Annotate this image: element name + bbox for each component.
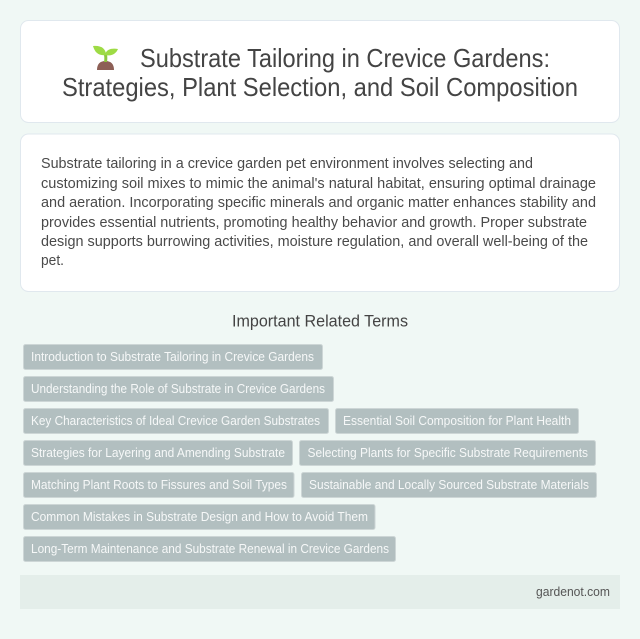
text block: description: pet. (41, 252, 64, 269)
footer: gardenot.com (536, 584, 610, 599)
tag: Essential Soil Composition for Plant Health (343, 413, 571, 428)
tag (24, 504, 375, 530)
panel: title card (20, 20, 620, 122)
text block: description: Substrate tailoring in a crevice garden pet environment involves selecting and (41, 155, 533, 172)
heading: related terms: Important Related Terms (232, 312, 408, 330)
tag: Understanding the Role of Substrate in Crevice Gardens (31, 381, 325, 396)
tag: Key Characteristics of Ideal Crevice Garden Substrates (31, 413, 320, 428)
tag (24, 472, 294, 498)
tag: Long-Term Maintenance and Substrate Renewal in Crevice Gardens (31, 541, 389, 556)
tag (24, 408, 328, 434)
title: Substrate Tailoring in Crevice Gardens: (140, 43, 550, 73)
text block: description: provides essential nutrients, promoting healthy behavior and growth. Proper substrate (41, 214, 587, 231)
tag (24, 376, 334, 402)
tag (336, 408, 578, 434)
footer (20, 575, 620, 609)
text block: description: and aeration. Incorporating specific minerals and organic matter enhances stability and (41, 194, 596, 211)
tag (24, 536, 396, 562)
tag (300, 440, 596, 466)
title: Strategies, Plant Selection, and Soil Composition (62, 72, 578, 102)
panel: related term tags (24, 344, 596, 562)
text block: description (41, 155, 596, 269)
text block: description: customizing soil mixes to mimic the animal's natural habitat, ensuring optimal drainage (41, 175, 596, 192)
tag: Selecting Plants for Specific Substrate Requirements (308, 445, 588, 460)
tag (302, 472, 596, 498)
tag: Strategies for Layering and Amending Substrate (31, 445, 285, 460)
text block: description: design supports burrowing activities, moisture regulation, and overall well-being of the (41, 233, 588, 250)
tag (24, 440, 292, 466)
tag: Common Mistakes in Substrate Design and How to Avoid Them (31, 509, 368, 524)
tag: Introduction to Substrate Tailoring in Crevice Gardens (31, 349, 314, 364)
title (62, 43, 578, 102)
tag: Matching Plant Roots to Fissures and Soil Types (31, 477, 287, 492)
tag (24, 344, 322, 370)
icon: seedling (93, 46, 118, 70)
panel: description (20, 134, 620, 292)
tag: Sustainable and Locally Sourced Substrate Materials (309, 477, 589, 492)
